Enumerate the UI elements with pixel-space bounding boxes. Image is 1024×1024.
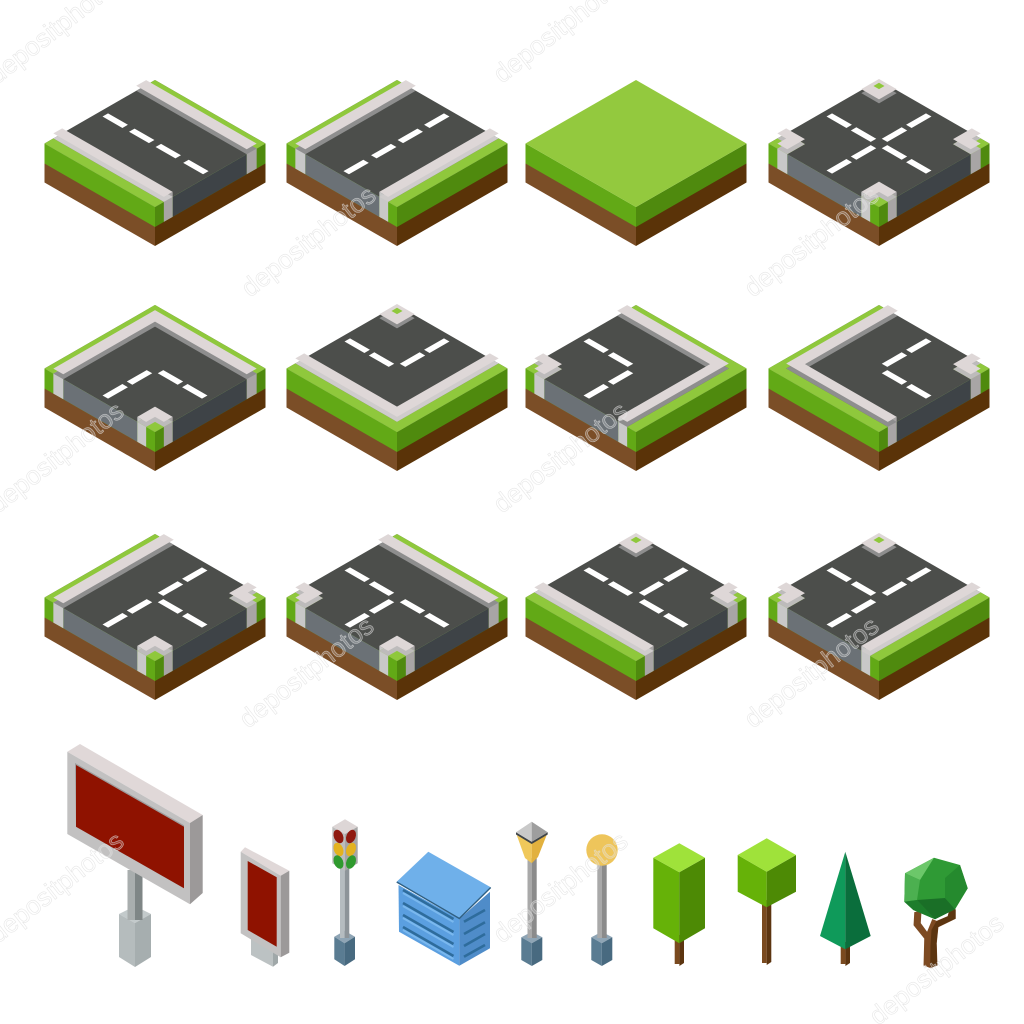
tile: plain grass — [526, 80, 746, 246]
tall box tree — [653, 843, 705, 966]
stock-photo watermark: depositphotos — [487, 825, 633, 949]
lane dashes — [343, 113, 449, 174]
large billboard — [67, 744, 203, 967]
stock-photo watermark: depositphotos — [738, 179, 884, 303]
tile: road bend, curb at front — [286, 300, 508, 471]
tile: road bend, curb at left — [768, 305, 990, 471]
blue shed building — [397, 852, 491, 966]
small billboard — [241, 847, 289, 967]
street lamp with globe — [586, 834, 618, 966]
conifer tree — [820, 852, 871, 966]
traffic light — [332, 819, 358, 966]
tile: road bend, curb at back — [44, 305, 266, 471]
stock-photo watermark: depositphotos — [487, 395, 633, 519]
low-poly round tree — [904, 858, 968, 967]
tile: T junction, curb at back right — [286, 534, 508, 700]
tile: T junction, curb at back left — [44, 534, 266, 700]
lane dashes — [103, 113, 209, 174]
street lamp with lantern — [516, 822, 548, 966]
tile: T junction, curb at front right — [768, 533, 990, 700]
tile: road bend, curb at right — [526, 305, 746, 471]
tile: straight road along other axis — [286, 80, 508, 246]
tile: T junction, curb at front left — [526, 533, 746, 700]
stock-photo watermark: depositphotos — [235, 179, 381, 303]
tile: four-way crossroad — [768, 79, 990, 246]
cube tree — [738, 838, 796, 965]
tile: straight road along one axis — [44, 80, 266, 246]
stock-photo watermark: depositphotos — [738, 610, 884, 734]
stock-photo watermark: depositphotos — [233, 610, 379, 734]
